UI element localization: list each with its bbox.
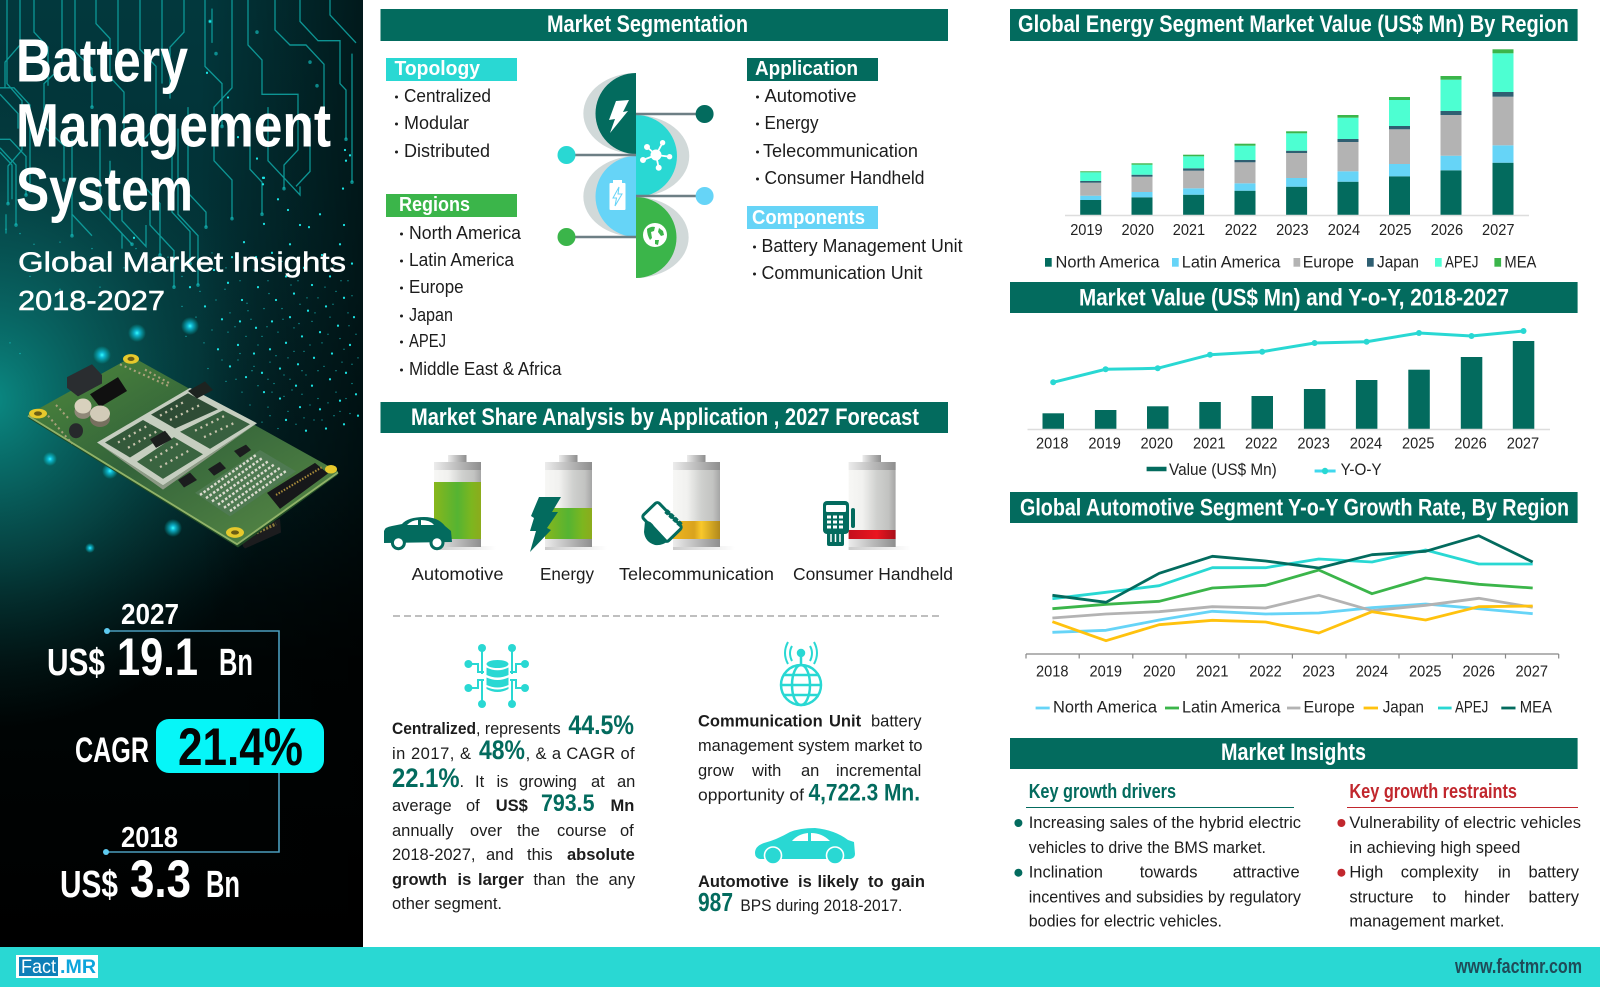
panel: key growth drivers: Key growth drivers: [1029, 781, 1176, 803]
panel: key growth restraints: [1337, 781, 1581, 931]
value bars: [1042, 341, 1534, 429]
text block: centralized: of: [466, 797, 480, 815]
text block: automotive: likely: [818, 873, 860, 891]
grey shadows: [583, 73, 636, 237]
year axis labels: 2020: [1122, 222, 1154, 239]
text block: centralized: growth: [392, 871, 447, 889]
year axis labels: 2022: [1249, 664, 1282, 681]
central segmentation graphic: [558, 73, 714, 278]
year axis labels: [1036, 435, 1539, 452]
legend: Europe: [1303, 253, 1354, 272]
legend: Japan: [1383, 697, 1424, 716]
panel: key growth drivers: Increasing sales of the hybrid electric: [1029, 814, 1301, 832]
text block: centralized: 48%: [479, 735, 525, 765]
footer bar: [0, 947, 1600, 987]
stat: 2027 market value: Bn: [219, 642, 253, 684]
year axis labels: [1036, 664, 1548, 681]
year axis labels: 2026: [1454, 435, 1487, 452]
segment: Components: [747, 206, 962, 283]
title: Battery: [16, 26, 188, 94]
text block: centralized: , & a CAGR of: [526, 745, 635, 763]
text block: automotive: Automotive: [698, 873, 789, 891]
text block: centralized: the: [576, 871, 599, 889]
panel: key growth drivers: vehicles to drive the BMS market.: [1029, 839, 1266, 857]
glowing dots: [43, 317, 199, 553]
segment: Topology: Centralized: [404, 86, 491, 106]
year axis labels: 2019: [1090, 664, 1122, 681]
icon: teal car: [755, 828, 855, 864]
text block: automotive: [698, 873, 925, 917]
legend: Japan: [1377, 253, 1419, 272]
text block: centralized: is: [458, 871, 471, 889]
label: Telecommunication: [619, 564, 774, 584]
text block: communication unit: grow: [698, 762, 734, 780]
text block: centralized: over: [470, 822, 503, 840]
legend: APEJ: [1455, 697, 1488, 716]
panel: key growth restraints: in achieving high speed: [1349, 839, 1520, 857]
panel: key growth drivers: incentives and subsidies by regulatory: [1029, 888, 1302, 906]
panel: key growth restraints: complexity: [1401, 864, 1479, 882]
stat: CAGR: [75, 718, 324, 777]
stat: 2027 market value: 2027: [121, 599, 179, 631]
text block: centralized: in 2017, &: [392, 745, 471, 763]
line chart: automotive growth by region: [1026, 536, 1559, 716]
year axis labels: 2027: [1482, 222, 1514, 239]
year axis labels: 2027: [1507, 435, 1539, 452]
segment: Components: Communication Unit: [762, 263, 922, 283]
year axis labels: 2018: [1036, 664, 1068, 681]
year axis labels: 2025: [1379, 222, 1412, 239]
Europe bars: [1080, 97, 1514, 196]
line: APEJ: [1052, 550, 1533, 599]
panel: key growth restraints: battery: [1528, 864, 1580, 882]
logo: Fact.MR: [16, 955, 98, 978]
logo: Fact.MR: .MR: [60, 957, 96, 978]
heading: Market Segmentation: [380, 9, 948, 41]
text block: centralized: 22.1%: [392, 763, 460, 793]
segment: Regions: North America: [409, 223, 522, 243]
panel: key growth drivers: bodies for electric vehicles.: [1029, 913, 1222, 931]
year axis labels: 2021: [1173, 222, 1205, 239]
text block: centralized: the: [517, 822, 540, 840]
text block: communication unit: with: [751, 762, 781, 780]
line: Europe: [1052, 595, 1533, 618]
label: Energy: [540, 564, 594, 584]
text block: automotive: BPS during 2018-2017.: [740, 897, 902, 915]
text block: centralized: any: [608, 871, 636, 889]
segment: Regions: Regions: [399, 194, 470, 216]
components: [67, 364, 102, 396]
title: Management: [16, 91, 331, 159]
text block: centralized: and: [486, 846, 514, 864]
legend: APEJ: [1445, 253, 1478, 272]
text block: centralized: absolute: [567, 846, 635, 864]
subtitle: [18, 246, 346, 316]
segment: Topology: Modular: [404, 113, 469, 133]
year axis labels: 2021: [1196, 664, 1228, 681]
text block: centralized: of: [620, 822, 634, 840]
title: System: [16, 156, 193, 224]
heading: Market Value and Y-o-Y: Market Value (US$ Mn) and Y-o-Y, 2018-2027: [1079, 285, 1509, 312]
year axis labels: 2021: [1193, 435, 1226, 452]
battery: Telecommunication: [619, 455, 774, 584]
segment: Regions: Japan: [409, 305, 453, 325]
year axis labels: 2019: [1070, 222, 1103, 239]
stat: 2027 market value: US$: [47, 642, 105, 684]
text block: centralized: .: [460, 773, 464, 791]
legend: [1147, 460, 1382, 479]
line: MEA: [1052, 536, 1533, 602]
year axis labels: 2020: [1140, 435, 1173, 452]
text block: communication unit: Communication: [698, 713, 823, 731]
stat: 2018 market value: [60, 822, 240, 909]
subtitle: Global Market Insights: [18, 246, 346, 277]
circuit board trace pattern: [0, 0, 356, 287]
line: Latin America: [1052, 570, 1533, 609]
battery: Consumer Handheld: [793, 455, 953, 584]
icon: car: [384, 517, 452, 549]
text block: centralized: larger: [478, 871, 524, 889]
year axis labels: 2022: [1245, 435, 1278, 452]
text block: centralized: 44.5%: [568, 710, 634, 740]
Y-o-Y line: [1050, 328, 1526, 385]
shield can: [97, 388, 257, 485]
stat: CAGR: CAGR: [75, 731, 149, 770]
year axis labels: 2019: [1088, 435, 1121, 452]
text block: centralized: an: [617, 773, 635, 791]
Japan bars: [1080, 92, 1514, 183]
segment: Application: [747, 58, 924, 188]
year axis labels: 2020: [1143, 664, 1176, 681]
legend: Latin America: [1182, 253, 1281, 272]
legend: Value (US$ Mn): [1169, 460, 1277, 479]
year axis labels: 2024: [1356, 664, 1389, 681]
panel: key growth restraints: battery: [1528, 888, 1580, 906]
segment: Application: Telecommunication: [763, 141, 918, 161]
text block: centralized: annually: [392, 822, 454, 840]
icon: battery: [610, 180, 626, 210]
text block: centralized: average: [392, 797, 452, 815]
text block: centralized: course: [557, 822, 607, 840]
segment: Application: Application: [755, 58, 858, 80]
segment: Topology: Distributed: [404, 141, 490, 161]
segment: Regions: Middle East & Africa: [409, 359, 562, 379]
year axis labels: 2026: [1431, 222, 1463, 239]
stat: CAGR: 21.4%: [178, 718, 303, 777]
segment: Regions: [386, 194, 562, 379]
year axis labels: 2025: [1409, 664, 1442, 681]
Latin America bars: [1080, 145, 1514, 200]
text block: automotive: to: [868, 873, 884, 891]
legend: North America: [1053, 697, 1158, 716]
panel: key growth drivers: attractive: [1233, 864, 1300, 882]
text block: communication unit: an: [801, 762, 819, 780]
year axis labels: [1070, 222, 1514, 239]
value timeline connector: [103, 628, 279, 855]
panel: key growth drivers: Inclination: [1029, 864, 1103, 882]
heading: Market Segmentation: Market Segmentation: [547, 11, 748, 38]
year axis labels: 2027: [1516, 664, 1548, 681]
text block: automotive: 987: [698, 887, 733, 917]
year axis labels: 2023: [1302, 664, 1335, 681]
icon: handheld device: [823, 501, 855, 546]
year axis labels: 2024: [1350, 435, 1383, 452]
heading: Market Insights: [1010, 738, 1578, 769]
text block: centralized: , represents: [476, 720, 561, 738]
segment: Application: Consumer Handheld: [764, 168, 924, 188]
text block: automotive: is: [798, 873, 812, 891]
text block: centralized: [392, 710, 636, 913]
logo: Fact.MR: Fact: [21, 957, 57, 978]
segment: Components: Battery Management Unit: [762, 236, 962, 256]
icon: antenna globe: [781, 642, 821, 705]
text block: communication unit: 4,722.3 Mn.: [808, 780, 920, 807]
icon: phone in hand: [642, 501, 682, 545]
icon: database circuit: [464, 644, 529, 708]
segment: Components: Components: [752, 207, 865, 229]
panel: key growth drivers: [1014, 781, 1302, 931]
year axis labels: 2025: [1402, 435, 1434, 452]
connector lines with end dots: [575, 114, 697, 237]
MEA bars: [1080, 49, 1514, 172]
icon: bolt: [530, 497, 561, 552]
segment: Topology: Topology: [394, 58, 481, 80]
panel: left sidebar: [0, 0, 363, 947]
text block: communication unit: battery: [871, 713, 922, 731]
segment: Topology: [386, 58, 517, 161]
segment: Application: Energy: [764, 113, 818, 133]
panel: key growth restraints: in: [1498, 864, 1511, 882]
year axis labels: 2023: [1276, 222, 1309, 239]
line: Japan: [1052, 606, 1533, 641]
text block: centralized: It: [475, 773, 485, 791]
legend: MEA: [1520, 697, 1552, 716]
heading: Market Insights: Market Insights: [1221, 739, 1366, 766]
stat: 2018 market value: US$: [60, 864, 118, 906]
segment: Regions: Latin America: [409, 250, 515, 270]
panel: key growth restraints: High: [1349, 864, 1383, 882]
text block: centralized: this: [527, 846, 553, 864]
text block: communication unit: management system market to: [698, 737, 922, 755]
panel: key growth drivers: towards: [1140, 864, 1197, 882]
heading: Market Share Analysis: Market Share Analysis by Application , 2027 Forecast: [411, 404, 919, 431]
line: North America: [1052, 604, 1533, 632]
panel: key growth restraints: Vulnerability of electric vehicles: [1349, 814, 1581, 832]
text block: centralized: at: [591, 773, 605, 791]
text block: communication unit: [698, 713, 922, 807]
text block: centralized: Centralized: [392, 720, 476, 738]
connectors: [267, 463, 328, 509]
year axis labels: 2018: [1036, 435, 1068, 452]
text block: centralized: other segment.: [392, 895, 502, 913]
segment: Regions: Europe: [409, 277, 464, 297]
text block: communication unit: incremental: [836, 762, 921, 780]
solder pad fields: [195, 450, 296, 516]
legend: [1045, 253, 1537, 272]
image: battery management circuit board: [28, 354, 338, 549]
title: [16, 26, 331, 224]
legend: Y-O-Y: [1341, 460, 1382, 479]
label: Automotive: [412, 564, 504, 584]
icon: globe: [643, 223, 667, 247]
stat: 2018 market value: 3.3: [130, 850, 191, 909]
text block: centralized: 2018-2027,: [392, 846, 476, 864]
APEJ bars: [1080, 53, 1514, 181]
North America bars: [1080, 163, 1514, 215]
panel: key growth restraints: management market.: [1349, 913, 1504, 931]
icon: network: [640, 140, 672, 170]
text block: centralized: growing: [519, 773, 577, 791]
stat: 2018 market value: 2018: [121, 822, 178, 854]
legend: Latin America: [1182, 697, 1281, 716]
circuit nodes and particles: [6, 21, 358, 431]
half circles: [596, 73, 636, 154]
legend: Europe: [1304, 697, 1355, 716]
panel: key growth restraints: Key growth restraints: [1349, 781, 1517, 803]
legend: [1036, 697, 1552, 716]
year axis labels: 2024: [1328, 222, 1361, 239]
mounting holes: [29, 409, 47, 418]
text block: centralized: is: [496, 773, 508, 791]
text block: communication unit: Unit: [829, 713, 862, 731]
stat: 2018 market value: Bn: [206, 864, 240, 906]
combo chart: market value and Y-o-Y: [1028, 328, 1550, 479]
label: Consumer Handheld: [793, 564, 953, 584]
text block: centralized: 793.5: [541, 790, 594, 817]
year axis labels: 2022: [1225, 222, 1257, 239]
segment: Application: Automotive: [764, 86, 856, 106]
panel: key growth restraints: structure: [1349, 888, 1414, 906]
text block: centralized: US$: [496, 797, 528, 815]
text block: communication unit: opportunity of: [698, 787, 804, 805]
year axis labels: 2023: [1297, 435, 1330, 452]
year axis labels: 2026: [1462, 664, 1495, 681]
panel: key growth restraints: to: [1432, 888, 1446, 906]
segment: Regions: APEJ: [409, 331, 446, 351]
text block: centralized: than: [533, 871, 566, 889]
text block: centralized: Mn: [610, 797, 634, 815]
battery: Automotive: [384, 455, 504, 584]
subtitle: 2018-2027: [18, 285, 165, 316]
legend: North America: [1056, 253, 1160, 272]
stacked bar chart: energy segment by region: [1045, 49, 1537, 272]
stat: 2027 market value: [47, 599, 253, 687]
stat: 2027 market value: 19.1: [117, 628, 198, 687]
legend: MEA: [1504, 253, 1537, 272]
battery: Energy: [530, 455, 607, 584]
text block: automotive: gain: [891, 873, 925, 891]
panel: key growth restraints: hinder: [1464, 888, 1510, 906]
icon: lightning bolt: [609, 100, 629, 133]
